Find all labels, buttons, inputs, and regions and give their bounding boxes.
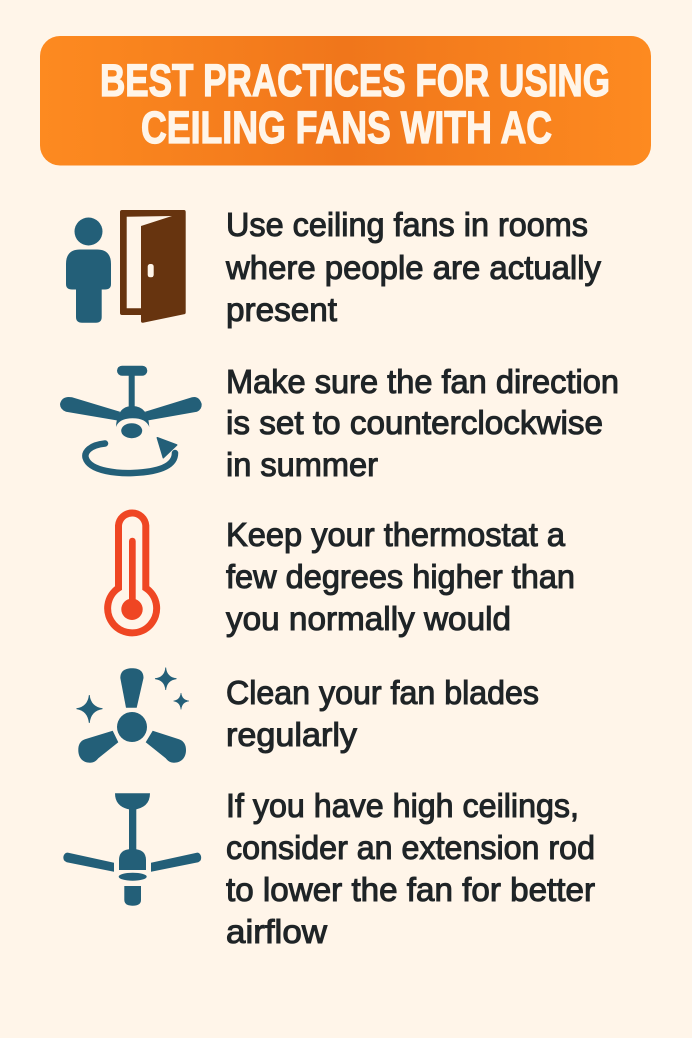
text: tip 2 (226, 363, 619, 483)
text: tip 3: few degrees higher than (226, 558, 575, 595)
text: tip 5 (226, 787, 595, 950)
text: tip 2: Make sure the fan direction (226, 363, 619, 400)
text: tip 5: If you have high ceilings, (226, 787, 579, 824)
text: tip 1: present (226, 291, 337, 328)
title banner (40, 36, 651, 166)
icon: ceiling fan with extension rod (63, 793, 201, 906)
text: tip 5: airflow (226, 913, 327, 950)
title (100, 55, 610, 153)
text: tip 1: where people are actually (225, 249, 601, 286)
text: tip 2: is set to counterclockwise (226, 404, 603, 441)
text: tip 4: regularly (226, 716, 358, 753)
text: tip 5: consider an extension rod (226, 829, 595, 866)
text: tip 3 (226, 516, 575, 637)
text: tip 3: Keep your thermostat a (226, 516, 566, 553)
icon: clean fan with sparkles (76, 668, 189, 763)
text: tip 1 (225, 206, 601, 328)
text: tip 1: Use ceiling fans in rooms (226, 206, 588, 243)
text: tip 5: to lower the fan for better (226, 871, 595, 908)
text: tip 3: you normally would (226, 600, 511, 637)
text: tip 2: in summer (226, 446, 378, 483)
title: CEILING FANS WITH AC (141, 102, 552, 153)
icon: ceiling fan with rotation arrow (60, 366, 202, 473)
text: tip 4: Clean your fan blades (226, 674, 539, 711)
icon: person beside open door (66, 210, 186, 323)
icon: thermometer (108, 513, 157, 633)
text: tip 4 (226, 674, 539, 753)
